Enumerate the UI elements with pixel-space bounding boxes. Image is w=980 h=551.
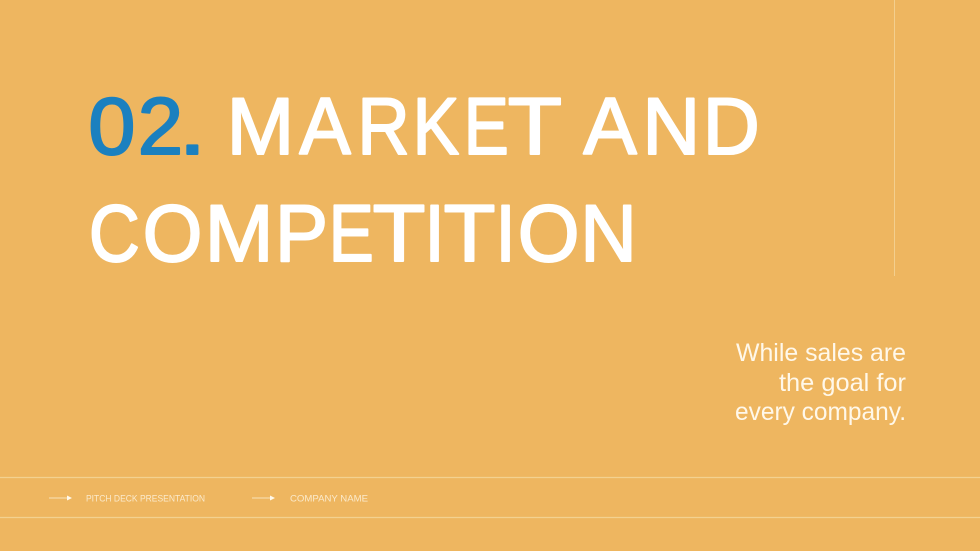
title line two: P: [275, 189, 328, 279]
title line two: N: [580, 189, 637, 279]
tagline: [735, 339, 906, 426]
title line two: M: [205, 189, 274, 279]
section number: .: [178, 82, 206, 172]
title line two: O: [518, 189, 580, 279]
title line one: T: [508, 82, 560, 172]
title line one: R: [357, 82, 410, 172]
icon: arrow: [49, 496, 72, 500]
footer label: PITCH DECK PRESENTATION: [86, 494, 205, 504]
tagline: the goal for: [779, 369, 906, 397]
icon: arrow: [252, 496, 275, 500]
title line two: T: [444, 189, 496, 279]
section number: 0: [88, 82, 135, 172]
title line one: D: [703, 82, 760, 172]
title line two: O: [143, 189, 202, 279]
title line one: N: [642, 82, 700, 172]
title line two: I: [495, 189, 516, 279]
section number: 2: [138, 82, 183, 172]
title line one: A: [583, 82, 637, 172]
footer item: company name: [252, 494, 368, 504]
tagline: While sales are: [736, 339, 906, 367]
title line two: T: [373, 189, 426, 279]
tagline: every company.: [735, 398, 906, 426]
title line one: M: [227, 82, 294, 172]
footer label: COMPANY NAME: [290, 494, 368, 504]
title line one: A: [299, 82, 351, 172]
title line one: E: [464, 82, 509, 172]
footer item: pitch deck presentation: [49, 494, 205, 504]
title line two: C: [89, 189, 140, 279]
title line one: K: [413, 82, 459, 172]
title: [88, 82, 760, 279]
title line two: E: [329, 189, 374, 279]
title line two: I: [424, 189, 445, 279]
